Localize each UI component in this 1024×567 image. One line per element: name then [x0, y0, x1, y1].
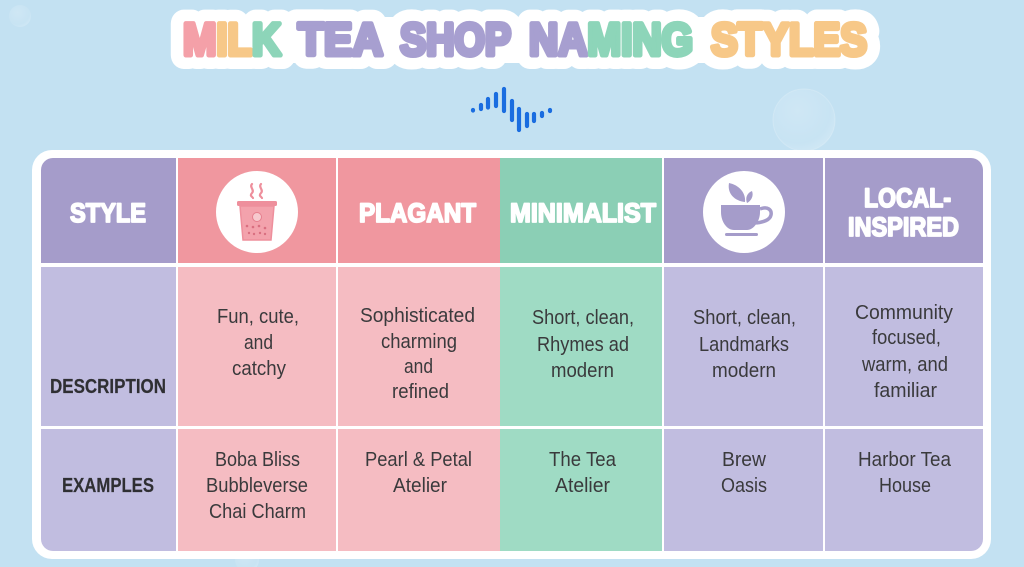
- icon: sound waveform: [473, 89, 550, 130]
- description: playful: [217, 305, 299, 380]
- description: plagant: charming: [381, 330, 457, 353]
- title: [176, 14, 876, 65]
- description: minimalist: modern: [551, 359, 614, 382]
- examples: plagant: Atelier: [393, 474, 447, 497]
- title coloured letters: MILK: [183, 14, 281, 65]
- examples row: [62, 448, 952, 523]
- header: style: STYLE: [70, 198, 146, 228]
- description: tea cup style: modern: [712, 359, 776, 382]
- icon: tea cup with leaves: [703, 171, 785, 253]
- header: local-inspired: INSPIRED: [848, 212, 959, 242]
- description: tea cup style: Landmarks: [699, 333, 789, 356]
- title coloured letters: TEA: [298, 14, 383, 65]
- title white outline: SHOP: [398, 14, 513, 65]
- examples: tea cup style: [721, 448, 767, 497]
- examples: minimalist: Atelier: [555, 474, 610, 497]
- title white outline: NAMING: [527, 14, 695, 65]
- label: description: DESCRIPTION: [50, 376, 166, 398]
- description: tea cup style: Short, clean,: [693, 306, 796, 329]
- examples: plagant: [365, 448, 472, 497]
- label: examples: EXAMPLES: [62, 475, 154, 497]
- description: plagant: [360, 304, 475, 403]
- description: local-inspired: Community: [855, 301, 954, 324]
- title coloured letters: SHOP: [400, 14, 511, 65]
- examples: local-inspired: Harbor Tea: [858, 448, 952, 471]
- header: minimalist: MINIMALIST: [510, 198, 656, 228]
- header row: [70, 171, 959, 253]
- description row: [50, 301, 954, 403]
- description: playful: and: [244, 331, 273, 354]
- description: minimalist: [532, 306, 634, 382]
- title white outline: [176, 14, 876, 65]
- examples: local-inspired: House: [879, 474, 931, 497]
- decorative bubble: bottom edge: [235, 548, 259, 567]
- examples: playful: Bubbleverse: [206, 474, 308, 497]
- examples: tea cup style: Brew: [722, 448, 766, 471]
- examples: tea cup style: Oasis: [721, 474, 767, 497]
- description: plagant: refined: [392, 380, 449, 403]
- examples: plagant: Pearl & Petal: [365, 448, 472, 471]
- description: playful: Fun, cute,: [217, 305, 299, 328]
- examples: minimalist: [549, 448, 617, 497]
- title coloured letters: [183, 14, 867, 65]
- title white outline: STYLES: [709, 14, 869, 65]
- title coloured letters: NAMING: [529, 14, 693, 65]
- examples: playful: Chai Charm: [209, 500, 306, 523]
- description: playful: catchy: [232, 357, 287, 380]
- examples: playful: Boba Bliss: [215, 448, 300, 471]
- description: local-inspired: focused,: [872, 326, 941, 349]
- header: plagant: PLAGANT: [359, 198, 476, 228]
- comparison table: [41, 158, 983, 551]
- examples: playful: [206, 448, 308, 523]
- description: plagant: and: [404, 355, 433, 378]
- description: tea cup style: [693, 306, 796, 382]
- examples: local-inspired: [858, 448, 952, 497]
- description: local-inspired: familiar: [874, 379, 937, 402]
- description: plagant: Sophisticated: [360, 304, 475, 327]
- description: minimalist: Short, clean,: [532, 306, 634, 329]
- header: local-inspired: LOCAL-: [864, 183, 951, 213]
- table card: [32, 150, 991, 559]
- header: local-inspired: [848, 183, 959, 242]
- decorative bubble: right of waveform: [773, 89, 835, 151]
- title white outline: TEA: [296, 14, 385, 65]
- description: local-inspired: warm, and: [861, 353, 948, 376]
- title coloured letters: STYLES: [711, 14, 867, 65]
- table cell fills: [41, 158, 983, 551]
- title white outline: MILK: [181, 14, 283, 65]
- description: minimalist: Rhymes ad: [537, 333, 629, 356]
- description: local-inspired: [855, 301, 954, 402]
- icon: bubble tea cup: [216, 171, 298, 253]
- decorative bubble: top left: [9, 5, 31, 27]
- examples: minimalist: The Tea: [549, 448, 617, 471]
